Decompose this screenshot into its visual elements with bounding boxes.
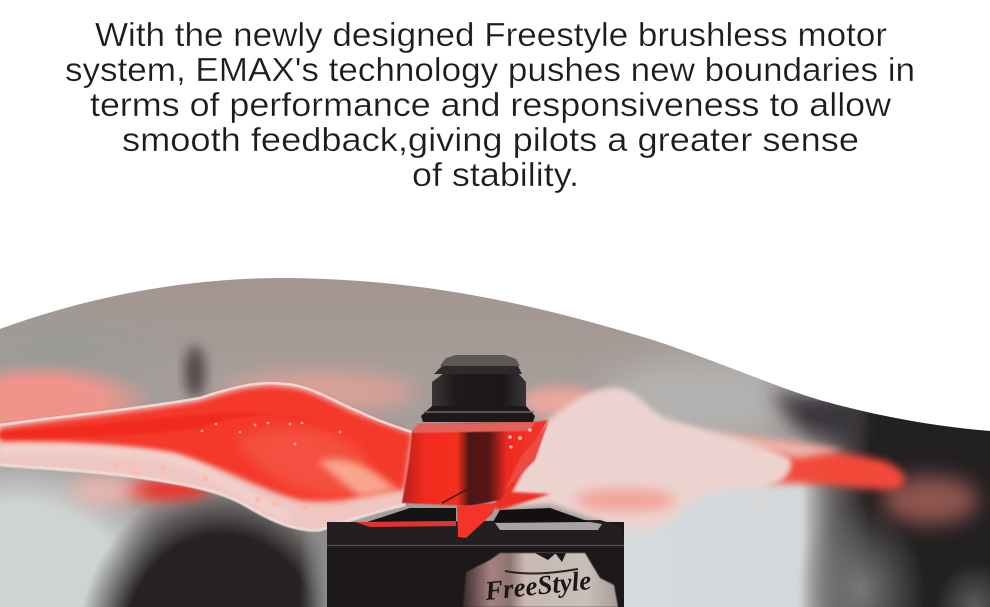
motor label artwork [463,553,618,607]
retaining nut [421,355,535,422]
propeller hub [402,420,549,538]
motor bell body [327,508,624,607]
water droplets [113,422,341,511]
heading paragraph [65,16,915,193]
heading paragraph: terms of performance and responsiveness to allow [90,86,891,123]
heading paragraph: With the newly designed Freestyle brushless motor [95,16,887,53]
heading paragraph: of stability. [412,156,579,193]
motor brand text: FreeStyle [482,565,593,606]
left propeller blade [0,383,412,530]
heading paragraph: smooth feedback,giving pilots a greater sense [122,121,859,158]
blurred photo background [0,278,990,607]
photo: motor with propeller in wave-shaped frame [0,278,990,607]
heading paragraph: system, EMAX's technology pushes new boundaries in [65,51,915,88]
right propeller blade (blurred) [492,388,905,529]
